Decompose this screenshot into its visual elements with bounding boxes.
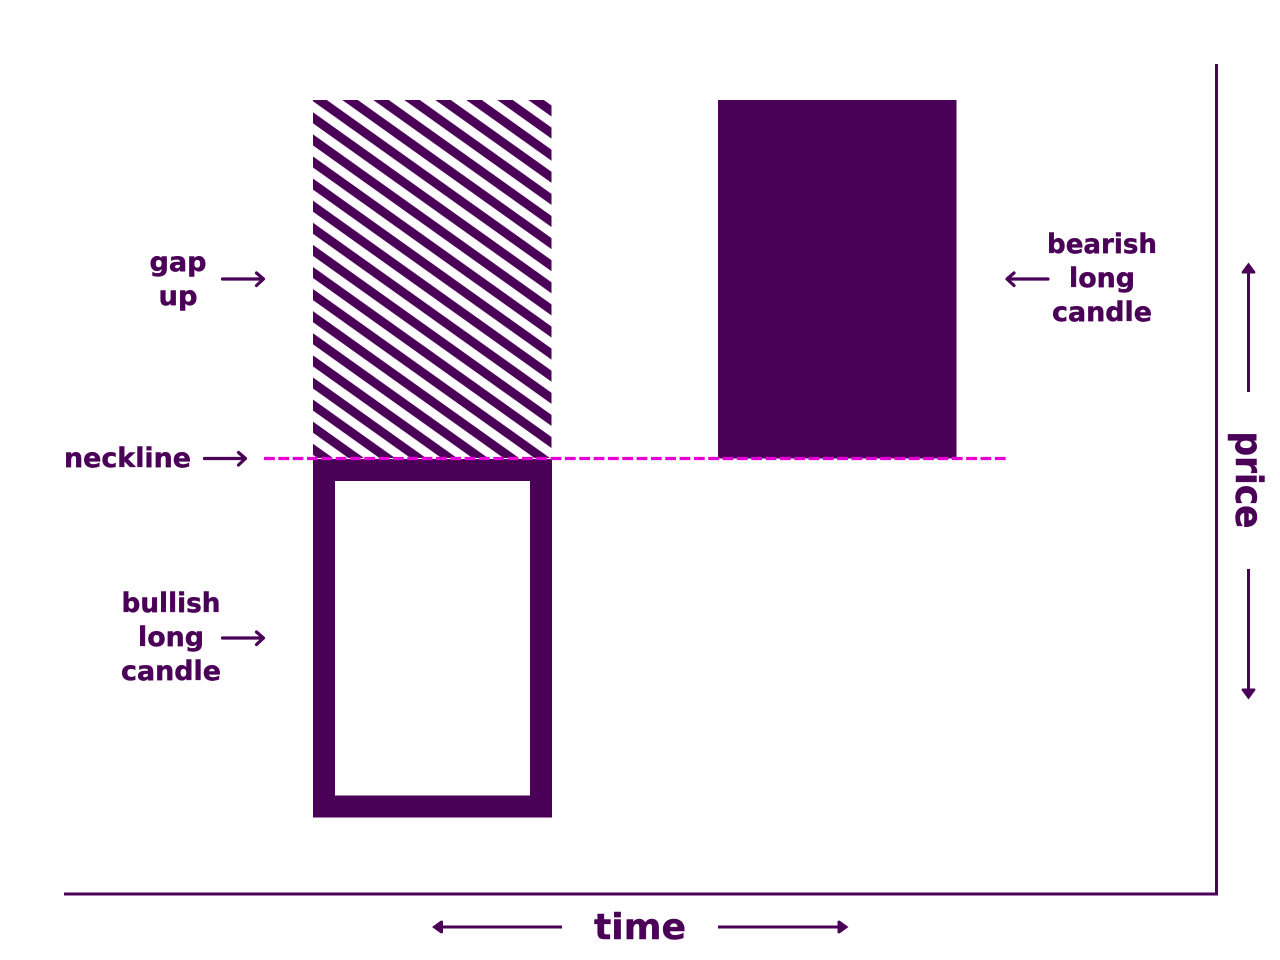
arrow: bullish <box>222 632 264 644</box>
bearish long candle <box>718 100 956 458</box>
arrow: bearish <box>1007 273 1048 286</box>
time axis <box>64 892 1218 896</box>
label: bullish long candle: long <box>138 622 204 653</box>
label: price: price <box>1227 432 1270 528</box>
label: time: time <box>594 907 686 948</box>
label: bullish long candle: bullish <box>122 588 220 619</box>
arrow: price down <box>1242 569 1256 700</box>
label: neckline: neckline <box>64 443 191 474</box>
label: bearish long candle: candle <box>1052 297 1152 328</box>
hatched gap up candle <box>313 100 552 458</box>
arrow: time right <box>718 920 848 934</box>
neckline dashed <box>264 457 1007 460</box>
label: gap up: gap <box>150 247 206 278</box>
arrow: gap up <box>222 273 264 286</box>
label: bearish long candle: bearish <box>1047 229 1157 260</box>
arrow: price up <box>1242 262 1256 392</box>
label: bullish long candle: candle <box>121 656 221 687</box>
label: gap up: up <box>158 281 198 312</box>
label: gap up <box>150 247 206 312</box>
bullish long candle <box>324 470 541 806</box>
label: bearish long candle <box>1047 229 1157 328</box>
label: bullish long candle <box>121 588 221 687</box>
price axis <box>1215 64 1218 895</box>
arrow: time left <box>432 920 562 934</box>
label: bearish long candle: long <box>1069 263 1135 294</box>
arrow: neckline <box>204 452 246 465</box>
